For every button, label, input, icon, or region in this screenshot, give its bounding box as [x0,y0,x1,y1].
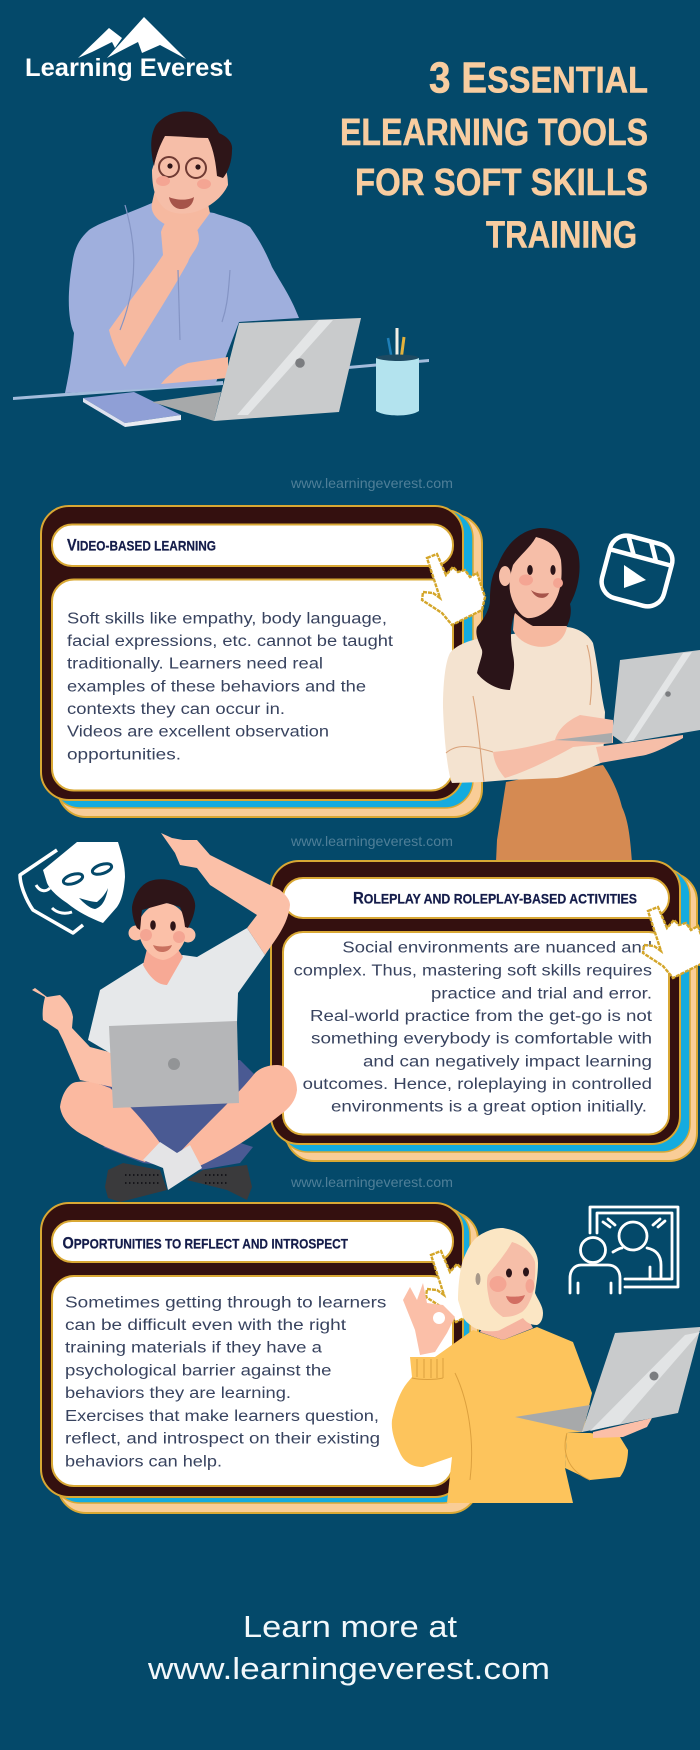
text block: opportunities: psychological barrier against the [65,1362,332,1379]
title: 3 ESSENTIAL [429,54,648,103]
text block: video-based learning [52,580,453,790]
panel: opportunities to reflect and introspect [41,1203,478,1513]
watermark 3: www.learningeverest.com [290,1174,453,1190]
heading: video-based learning [52,524,453,566]
text block: roleplay [283,932,669,1134]
text block: video-based learning: Videos are excellent observation [67,724,329,741]
text block: video-based learning: facial expressions, etc. cannot be taught [67,633,394,650]
icon: video reel [598,532,676,610]
panel: video-based learning [41,506,482,817]
logo: Learning Everest: Learning Everest [25,54,233,82]
text block: video-based learning: Soft skills like empathy, body language, [67,610,387,627]
footer call to action [147,1609,550,1686]
text block: roleplay: something everybody is comfortable with [311,1031,652,1048]
text block: opportunities: can be difficult even with the right [65,1317,347,1334]
heading: roleplay [283,878,669,918]
text block: roleplay: Real-world practice from the get-go is not [310,1008,653,1025]
title: ELEARNING TOOLS [340,112,648,154]
heading: roleplay: ROLEPLAY AND ROLEPLAY-BASED ACTIVITIES [353,888,637,907]
text block: opportunities: behaviors they are learning. [65,1385,291,1402]
text block: opportunities: training materials if they have a [65,1340,322,1357]
watermark 1: www.learningeverest.com [290,475,453,491]
illustration: man thinking at laptop [13,112,429,427]
logo: Learning Everest [25,17,233,82]
text block: opportunities: behaviors can help. [65,1453,222,1470]
text block: opportunities: reflect, and introspect on their existing [65,1431,380,1448]
icon: theatre masks [20,842,125,933]
text block: video-based learning: traditionally. Learners need real [67,656,323,673]
title: FOR SOFT SKILLS [355,162,648,204]
text block: roleplay: Social environments are nuanced and [342,940,652,957]
title [340,54,648,257]
heading: opportunities: OPPORTUNITIES TO REFLECT AND INTROSPECT [62,1233,348,1252]
watermark 2: www.learningeverest.com [290,833,453,849]
footer call to action: Learn more at [243,1609,457,1644]
text block: video-based learning: examples of these behaviors and the [67,678,366,695]
footer call to action: www.learningeverest.com [147,1651,550,1686]
icon: cursor hand 1 [422,554,485,625]
heading: opportunities [52,1221,453,1262]
text block: opportunities: Exercises that make learners question, [65,1408,379,1425]
text block: roleplay: environments is a great option initially. [331,1099,647,1116]
title: TRAINING [486,215,637,257]
illustration: blonde woman with laptop [392,1228,700,1503]
text block: roleplay: practice and trial and error. [431,985,652,1002]
text block: opportunities [52,1276,453,1486]
panel: roleplay and roleplay-based activities [271,861,697,1161]
text block: roleplay: and can negatively impact learning [363,1053,652,1070]
text block: roleplay: outcomes. Hence, roleplaying in controlled [303,1076,652,1093]
text block: opportunities: Sometimes getting through to learners [65,1294,387,1311]
icon: person with mirror [570,1207,678,1293]
icon: cursor hand 3 [426,1251,489,1322]
icon: cursor hand 2 [643,907,700,978]
illustration: woman with laptop [443,528,700,862]
text block: roleplay: complex. Thus, mastering soft skills requires [294,963,652,980]
illustration: seated man pointing [32,833,297,1202]
heading: video-based learning: VIDEO-BASED LEARNING [67,536,216,555]
text block: video-based learning: contexts they can occur in. [67,701,285,718]
text block: video-based learning: opportunities. [67,746,181,763]
